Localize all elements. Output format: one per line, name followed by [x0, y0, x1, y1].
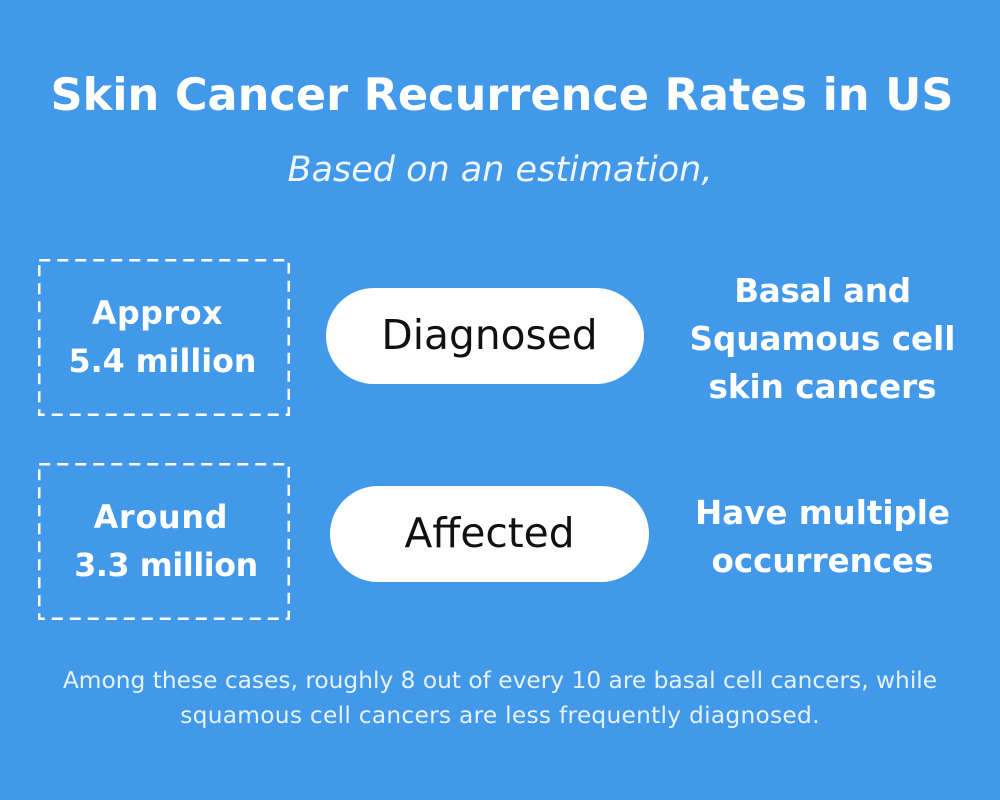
description: basal and squamous	[690, 272, 955, 406]
description: basal and squamous: skin cancers	[708, 368, 937, 406]
subtitle: Based on an estimation,	[288, 150, 712, 190]
panel: diagnosed row	[38, 259, 955, 416]
panel: affected row	[38, 463, 950, 620]
description: multiple occurrences: Have multiple	[695, 494, 950, 532]
stat text: approx 5.4 million	[69, 296, 256, 380]
stat box: around 3.3 million	[38, 463, 290, 620]
stat text: around 3.3 million	[74, 500, 258, 584]
stat box: approx 5.4 million	[38, 259, 290, 416]
footnote: Among these cases, roughly 8 out of every 10 are basal cell cancers, while	[63, 667, 937, 694]
title: Skin Cancer Recurrence Rates in US	[50, 69, 953, 121]
description: basal and squamous: Basal and	[734, 272, 911, 310]
footnote: squamous cell cancers are less frequently diagnosed.	[180, 702, 820, 729]
pill: diagnosed	[326, 288, 644, 384]
pill: affected: Affected	[404, 509, 575, 557]
description: multiple occurrences	[695, 494, 950, 580]
pill: affected	[330, 486, 649, 582]
stat text: approx 5.4 million: 5.4 million	[69, 344, 256, 380]
stat text: around 3.3 million: Around	[94, 500, 228, 536]
stat text: around 3.3 million: 3.3 million	[74, 548, 258, 584]
stat text: approx 5.4 million: Approx	[92, 296, 223, 332]
pill: diagnosed: Diagnosed	[381, 311, 598, 359]
description: basal and squamous: Squamous cell	[690, 320, 955, 358]
description: multiple occurrences: occurrences	[712, 542, 933, 580]
footnote	[63, 667, 937, 729]
